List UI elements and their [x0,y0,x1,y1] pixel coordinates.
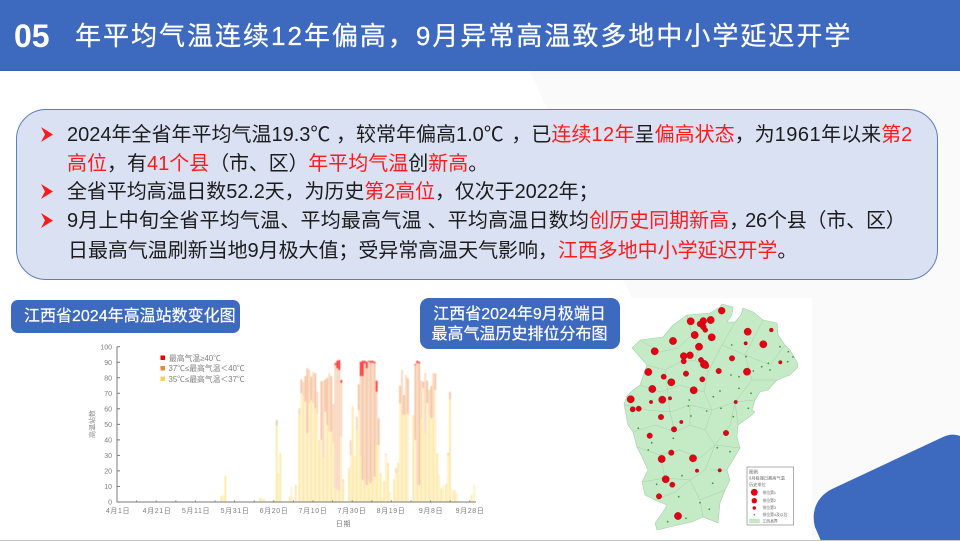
map legend [747,467,794,525]
map white backing [621,298,812,541]
y axis tick labels: 20 [104,468,112,476]
bars: above 40 degree stations [335,360,419,392]
map legend: 排位第3 [762,505,776,510]
chart legend: 35℃≤最高气温＜37℃ [168,374,245,384]
map legend: 历史排位 [749,481,766,488]
y axis tick labels: 60 [104,406,112,414]
heading: map [420,298,620,349]
map body [624,304,798,530]
heading: station chart: 江西省2024年高温站数变化图 [24,308,236,325]
map legend: 图例 [749,468,758,476]
bars: 35-37 degree stations [221,388,474,502]
icon: bullet arrow 3 [41,213,53,228]
bars: 37-40 degree stations [277,362,450,492]
map legend: 9月极端日最高气温 [749,474,786,482]
map legend: 排位第4及以后 [762,512,788,517]
x axis tick labels: 6月20日 [260,507,288,515]
bullet 3 line 1: 9月上中旬全省平均气温、平均最高气温 、平均高温日数均创历史同期新高，26个县（市、区） [67,210,906,232]
county dots: rank 4 and later [637,344,794,523]
y axis tick labels: 100 [100,344,112,352]
chart legend: 最高气温≥40℃ [169,353,221,363]
y axis title: 高温站数 [88,410,96,438]
heading: map: 江西省2024年9月极端日 [433,306,606,323]
x axis tick labels: 9月8日 [419,507,443,515]
bullet 1 line 2: 高位，有41个县（市、区）年平均气温创新高。 [67,153,488,175]
heading: map: 最高气温历史排位分布图 [431,326,608,342]
x axis title: 日期 [336,520,351,528]
y axis tick labels: 10 [104,484,112,491]
header bar [0,0,960,71]
chart bars [221,360,474,502]
x axis tick labels: 4月21日 [143,507,171,515]
chart axes [117,347,476,502]
chart legend: 37℃≤最高气温＜40℃ [168,363,245,373]
y axis tick labels: 0 [108,500,112,506]
icon: bullet arrow 2 [41,184,53,199]
province outline [624,304,798,530]
map legend: 排位第2 [762,498,776,503]
county dots: rank 1-3 [627,307,782,520]
x axis tick labels: 5月31日 [221,507,249,515]
x axis tick labels: 5月11日 [182,507,210,515]
county borders [625,315,785,517]
y axis tick labels: 30 [104,453,112,460]
icon: bullet arrow 1 [41,127,53,142]
summary text block [41,124,912,262]
map legend: 江西县界 [762,519,778,524]
y axis tick labels: 90 [104,360,112,367]
x axis tick labels: 7月30日 [338,507,366,515]
title: 年平均气温连续12年偏高，9月异常高温致多地中小学延迟开学 [75,21,852,51]
y axis tick labels [100,344,112,506]
bullet 2: 全省平均高温日数52.2天，为历史第2高位，仅次于2022年； [67,181,598,203]
x axis tick labels: 4月1日 [106,507,130,515]
bullet 1 line 1: 2024年全省年平均气温19.3℃ ，较常年偏高1.0℃ ，已连续12年呈偏高状态，为1961年以来第2 [67,124,912,146]
bullet 3 line 2: 日最高气温刷新当地9月极大值；受异常高温天气影响，江西多地中小学延迟开学。 [68,240,797,262]
y axis tick labels: 40 [104,438,112,444]
x axis tick labels: 8月19日 [377,507,405,515]
x axis tick labels: 7月10日 [299,507,327,515]
x axis tick labels: 9月28日 [456,507,484,515]
heading: station chart [11,300,240,333]
section number: 05 [14,18,50,54]
x axis tick labels [106,507,484,515]
y axis tick labels: 50 [104,422,112,429]
chart legend [160,353,245,384]
y axis tick labels: 70 [104,391,112,398]
y axis tick labels: 80 [104,376,112,382]
map legend: 排位第1 [762,490,776,495]
panel: summary [16,109,938,280]
